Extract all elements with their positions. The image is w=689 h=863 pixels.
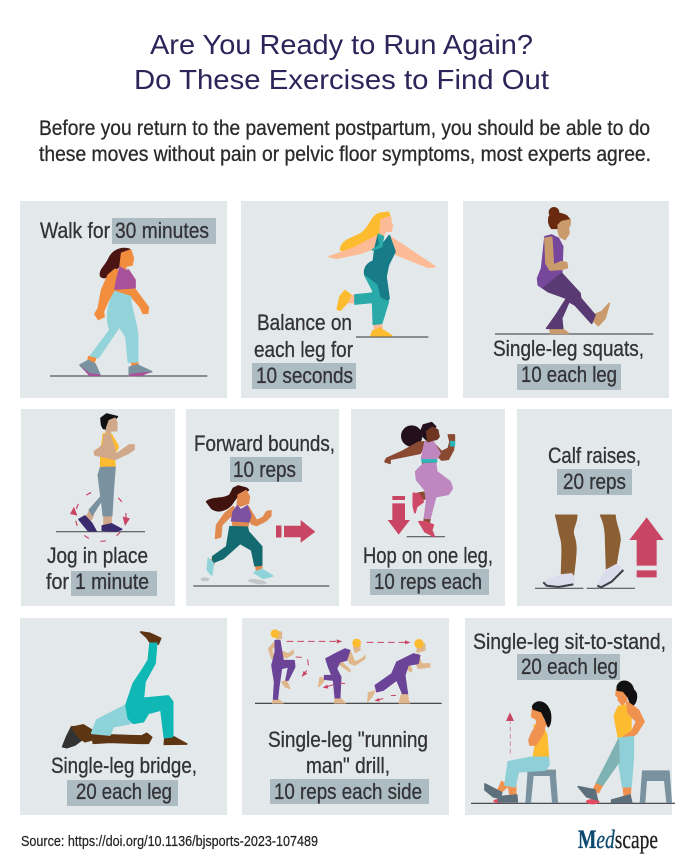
arrow: dashed up: [506, 712, 514, 753]
label: forward bounds: 10 reps: [233, 457, 296, 482]
panel: single-leg squats: [463, 201, 669, 398]
label: running man drill: 10 reps each side: [274, 779, 422, 804]
label: hop on one leg: Hop on one leg,: [363, 543, 493, 568]
label: calf raises: Calf raises,: [548, 443, 641, 468]
logo: Medscape: Medscape: [578, 825, 658, 854]
figure: balancing woman: [329, 212, 435, 337]
label: single-leg squats: 10 each leg: [521, 362, 617, 387]
label: single-leg bridge: [51, 753, 197, 804]
title: Do These Exercises to Find Out: [134, 64, 549, 95]
arrows: movement cues: [287, 639, 411, 702]
label: sit-to-stand: 20 each leg: [521, 654, 618, 679]
label: balance on each leg: [254, 310, 353, 388]
label: jog in place: Jog in place: [47, 543, 148, 568]
label: balance on each leg: 10 seconds: [256, 363, 353, 388]
label: single-leg squats: [493, 336, 644, 387]
label: single-leg bridge: 20 each leg: [76, 779, 172, 804]
label: balance on each leg: Balance on: [257, 310, 352, 335]
panel: forward bounds: [186, 409, 339, 606]
icon: right arrow: [276, 520, 315, 543]
label: balance on each leg: each leg for: [254, 337, 353, 362]
title: Are You Ready to Run Again?: [150, 29, 533, 60]
intro text: Before you return to the pavement postpartum, you should be able to do: [39, 117, 650, 140]
panel: walk: [20, 201, 227, 398]
source line: Source: https://doi.org/10.1136/bjsports-2023-107489: [21, 833, 318, 850]
label: jog in place: for: [46, 569, 69, 594]
figure: walking woman: [50, 249, 207, 376]
icon: up arrow: [629, 517, 664, 577]
panel: calf raises: [517, 409, 672, 606]
label: sit-to-stand: [473, 629, 666, 679]
label: jog in place: [46, 543, 149, 594]
panel: running man drill: [242, 618, 449, 815]
label: calf raises: [548, 443, 641, 494]
label: forward bounds: Forward bounds,: [194, 431, 335, 456]
figure: running man sequence: [255, 629, 442, 703]
intro text: these moves without pain or pelvic floor symptoms, most experts agree.: [39, 143, 651, 166]
panel: jog in place: [21, 409, 175, 606]
label: single-leg squats: Single-leg squats,: [493, 336, 644, 361]
panel: balance: [241, 201, 448, 398]
figure: hopping woman: [385, 423, 454, 537]
label: walk for 30 minutes: Walk for: [40, 218, 110, 243]
figure: jogging woman: [56, 414, 145, 541]
label: single-leg bridge: Single-leg bridge,: [51, 753, 197, 778]
label: running man drill: man" drill,: [306, 753, 390, 778]
panel: hop on one leg: [351, 409, 505, 606]
label: hop on one leg: [363, 543, 493, 594]
label: walk for 30 minutes: 30 minutes: [115, 218, 209, 243]
panel: single-leg bridge: [20, 618, 227, 815]
label: calf raises: 20 reps: [563, 469, 626, 494]
figure: running woman: [193, 486, 329, 586]
figure: bridge pose: [63, 632, 187, 748]
panel: single-leg sit-to-stand: [465, 618, 675, 815]
label: hop on one leg: 10 reps each: [374, 569, 482, 594]
title: [134, 29, 549, 95]
label: running man drill: [268, 727, 428, 804]
intro text: [39, 117, 651, 166]
label: running man drill: Single-leg "running: [268, 727, 428, 752]
figure: sit to stand: [471, 681, 675, 804]
label: jog in place: 1 minute: [75, 569, 149, 594]
figure: squatting woman: [495, 207, 653, 334]
icon: down arrow: [388, 496, 410, 535]
label: walk for 30 minutes: [40, 218, 209, 243]
figure: calves and shoes: [535, 515, 664, 588]
label: forward bounds: [194, 431, 335, 482]
